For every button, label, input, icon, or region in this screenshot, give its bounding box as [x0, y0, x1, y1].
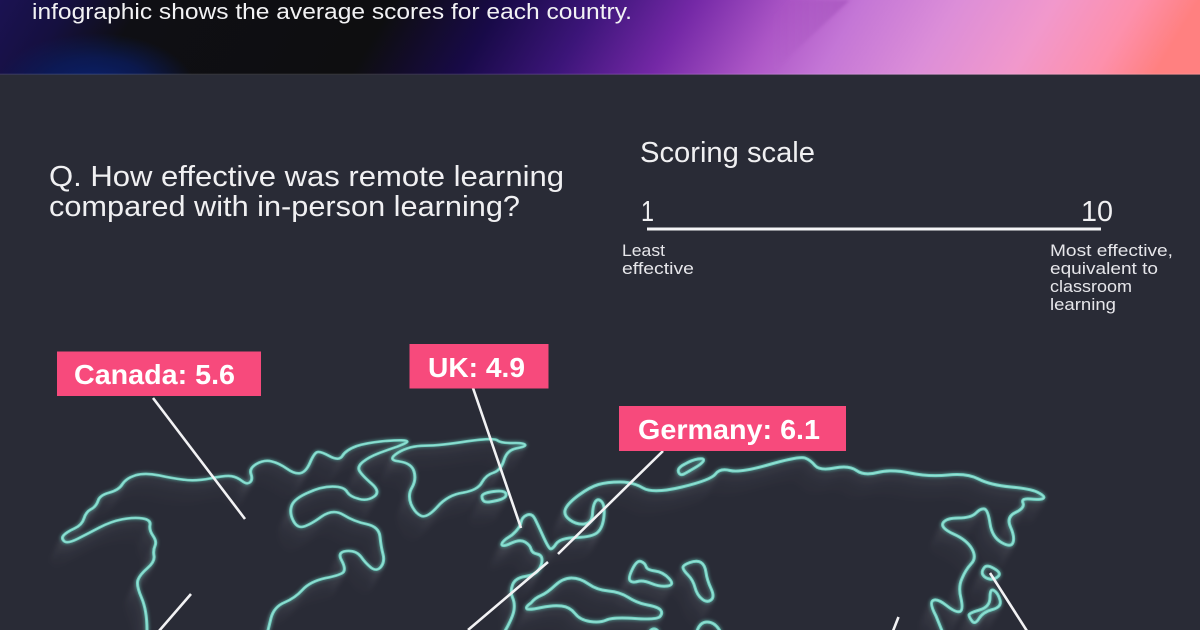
- label: Germany: [619, 406, 846, 451]
- scale line: [647, 228, 1101, 230]
- label: UK: [410, 344, 548, 388]
- most effective note: classroom: [1050, 277, 1132, 296]
- scale minimum: 1: [641, 196, 654, 228]
- most effective note: equivalent to: [1050, 259, 1158, 278]
- scoring scale: [622, 137, 1173, 314]
- most effective note: Most effective,: [1050, 241, 1173, 260]
- scoring scale heading: Scoring scale: [640, 137, 815, 169]
- question text: [49, 161, 564, 223]
- scale maximum: 10: [1081, 196, 1113, 228]
- label: Canada: [57, 352, 261, 396]
- most effective note: learning: [1050, 295, 1116, 314]
- question text: compared with in-person learning?: [49, 191, 520, 223]
- label: Canada: Canada: 5.6: [74, 359, 235, 390]
- leader lines: [153, 388, 1027, 630]
- least effective note: effective: [622, 259, 694, 278]
- least effective note: [622, 241, 694, 278]
- label: UK: UK: 4.9: [428, 352, 525, 383]
- label: Germany: Germany: 6.1: [638, 414, 820, 445]
- world map outline: [52, 439, 1044, 630]
- most effective note: [1050, 241, 1173, 314]
- question text: Q. How effective was remote learning: [49, 161, 564, 193]
- header banner: [0, 0, 1200, 75]
- least effective note: Least: [622, 241, 665, 260]
